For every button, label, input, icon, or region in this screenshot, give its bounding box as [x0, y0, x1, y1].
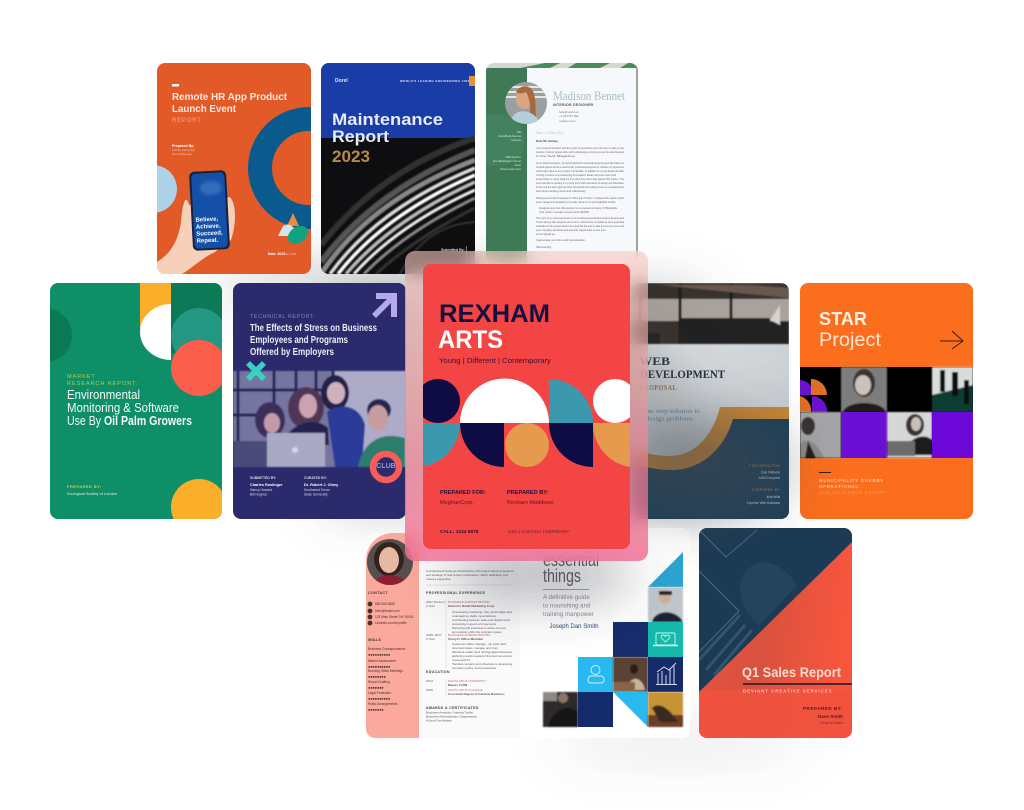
geometric tile	[800, 379, 827, 412]
heading text: Joseph Dan Smith	[550, 624, 599, 630]
letter body: Date: 12 May, 2023	[536, 131, 564, 135]
contact and skills: 555-555-5555	[375, 602, 395, 606]
title: Prepared By:	[172, 144, 194, 148]
footer text: DUE DILIGENCE REPORT	[819, 490, 888, 495]
experience column: company policy and procedures	[452, 666, 496, 670]
title: Date: 2023	[268, 252, 285, 256]
prepared text	[747, 464, 780, 505]
background shadow glow	[210, 269, 810, 750]
title text: Offered by Employers	[250, 347, 334, 358]
contact and skills: ●●●●●●●●●●	[368, 696, 391, 701]
title text: Use By Oil Palm Growers	[67, 414, 192, 428]
prepared text: PREPARED BY	[752, 488, 780, 492]
prepared text: Superior Web Solutions	[747, 501, 780, 505]
phone	[189, 170, 230, 251]
frosted glass panel	[405, 251, 648, 561]
letter body: hospital spaces and as a result of this professional experience I believe my experience	[536, 165, 624, 169]
letter body: Cost Cutter renovation project worth $30000	[539, 210, 589, 214]
letter body: I have along with projects and more I should the considered as a potential	[536, 220, 624, 224]
title text: TECHNICAL REPORT:	[250, 314, 315, 320]
contact and skills: ●●●●●●●	[368, 707, 384, 712]
experience column: PROFESSIONAL EXPERIENCE	[426, 591, 486, 595]
dark diagonal photo	[699, 528, 852, 692]
footer text: MUNICIPALITY DUKRÉS	[819, 478, 884, 483]
proposal heading: DEVELOPMENT	[640, 369, 725, 381]
contact line	[440, 529, 570, 535]
experience column: Master in BM	[448, 683, 468, 687]
title: Event Manager	[172, 152, 192, 156]
sidebar address: Preservation Ave	[500, 167, 521, 171]
name: madison.com	[559, 119, 576, 123]
letter body: position of interior design officer with a challenging company as per the advertisement	[536, 150, 624, 154]
header and title: WORLD'S LEADING ENGINEERING FIRM	[400, 79, 471, 83]
proposal heading: PROPOSAL	[640, 384, 677, 392]
prepared text: Julia Wills	[766, 495, 780, 499]
prepared for block: MeghanCorp.	[440, 500, 474, 506]
submitter text	[250, 476, 339, 496]
proposal heading: your design problems	[631, 416, 694, 422]
letter body: Designed more than office spaces for a renowned company in Philadelphia	[539, 206, 617, 210]
person tile	[578, 657, 613, 692]
hand holding phone	[157, 197, 235, 274]
contact and skills: Market Assessment	[368, 659, 396, 663]
contact and skills: SKILLS	[368, 638, 381, 642]
experience column: Overseeing marketing, risk, and budget and	[452, 610, 512, 614]
cover title: ARTS	[438, 326, 503, 354]
title: Remote HR App Product	[172, 91, 287, 103]
card: Q1 Sales Report	[699, 528, 852, 738]
submitter text: Bill Hughes	[250, 492, 267, 496]
collage of report cards	[50, 63, 973, 766]
experience column: career expertise	[426, 577, 451, 581]
card: Remote HR App	[157, 63, 311, 274]
letter body: company.	[536, 232, 556, 236]
sidebar address: 100	[516, 130, 521, 134]
experience column: SANTA CRUZ UNIVERSITY	[448, 679, 487, 683]
title text: Zoological Society of London	[67, 491, 117, 496]
prepared text: AAW Everyone	[758, 476, 780, 480]
card: resume	[366, 533, 526, 738]
heading text: essential	[543, 550, 599, 570]
letter body: in the New Magazine.	[536, 154, 576, 158]
letter body: to this and are well organized and successful and I always focus on completing the	[536, 185, 624, 189]
photo: woman at laptop	[887, 412, 932, 458]
photo: chess	[932, 367, 973, 412]
experience column: research	[452, 658, 470, 662]
card: STAR Project	[800, 283, 973, 519]
header and title: Maintenance	[332, 110, 443, 129]
report title	[742, 664, 852, 725]
contact line: USA | CANADA | GERMANY	[508, 529, 570, 535]
submitter text: Charles Roslinger	[250, 483, 283, 487]
experience column: Customer office manage, run point and	[452, 642, 506, 646]
contact line: CALL: 1234 5678	[440, 529, 479, 535]
submitter text: State University	[304, 492, 328, 496]
phone slogan: Repeat.	[196, 238, 219, 245]
title: Ashley Campbell	[172, 148, 195, 152]
light blue circle	[157, 165, 177, 213]
experience column: BUSINESS ADMINISTRATOR	[448, 600, 490, 604]
card: Web Development	[630, 283, 789, 519]
experience column: All and Certificates	[426, 718, 452, 722]
title text: Employees and Programs	[250, 335, 348, 346]
name: INTERIOR DESIGNER	[553, 103, 594, 107]
experience column: 2 Year	[426, 604, 435, 608]
architecture strands	[321, 138, 475, 274]
arrow icon	[372, 293, 397, 318]
heading text	[543, 550, 599, 630]
experience column: A professional business Administrator with project-based experience	[426, 569, 514, 573]
name: +1 234 567 890	[559, 114, 579, 118]
cross icon	[246, 361, 266, 381]
title: REPORT	[172, 118, 202, 124]
prepared for block: PREPARED FOR:	[440, 490, 486, 496]
experience column: 2 Year	[426, 637, 435, 641]
report title: Head of Sales	[820, 721, 843, 725]
experience column: 2013	[426, 679, 433, 683]
report title: DEVIANT CREATIVE SERVICES	[743, 688, 832, 694]
green sidebar	[486, 68, 527, 263]
title text: PREPARED BY:	[67, 484, 102, 489]
heading: Project	[819, 329, 882, 351]
sidebar address	[493, 130, 522, 171]
experience column: processing requests and payments	[452, 622, 496, 626]
leaves band	[486, 63, 638, 263]
title: Jan 2023	[284, 252, 297, 256]
letter body: your company and look and see that I appreciate to see your	[536, 228, 606, 232]
sidebar address: Newark	[512, 138, 522, 142]
photo: smiling woman	[841, 367, 887, 412]
name: Madison Bennet	[553, 88, 625, 103]
letter body	[536, 131, 624, 249]
letter body: I bring a focus on producing innovative ideas and are well and	[536, 173, 616, 177]
report title: Dave Smith	[818, 714, 843, 719]
experience column: Sharon's Retail Marketing Corp.	[448, 604, 495, 608]
experience column: managing daily operations	[452, 614, 497, 618]
cover title: REXHAM	[439, 300, 550, 328]
title	[172, 84, 297, 256]
experience column: and analysis within the company system	[452, 630, 502, 634]
experience column: SANTA CRUZ COLLEGE	[448, 688, 483, 692]
footer text: OPERATIONAL	[819, 484, 859, 489]
submitter text: Southwest Texas	[304, 488, 330, 492]
sidebar address: Wilming Ave	[506, 155, 521, 159]
arrow icon	[940, 331, 963, 349]
red ring badge	[373, 454, 399, 480]
red ring badge: CLUB	[376, 463, 396, 470]
header and title	[332, 76, 475, 264]
people	[255, 402, 285, 438]
heading text: things	[543, 566, 581, 586]
title text	[67, 374, 192, 496]
header and title: Submitted By:	[441, 248, 465, 252]
decorative ring	[248, 107, 311, 229]
header and title: 2023	[332, 147, 370, 166]
header and title: Report	[332, 127, 389, 146]
contact and skills: 123 Main Street, NY 10001	[375, 615, 414, 619]
experience column: Worked under and during appointments	[452, 650, 512, 654]
letter body: work will also be working in my work and credit extensions of design and fabrication	[536, 181, 624, 185]
cover title: Young | Different | Contemporary	[439, 356, 551, 365]
sidebar address: Del Washington Street	[493, 159, 521, 163]
contact and skills: ●●●●●●●	[368, 685, 384, 690]
name: hello@mail.com	[559, 110, 580, 114]
title text	[250, 314, 377, 358]
card: essential things	[520, 528, 690, 738]
chart tile	[648, 657, 683, 692]
letter body: As an Interior Designer I am accomplished in functional designing and fabrication for	[536, 161, 624, 165]
letter body: successfully to many distance in a short time that I also gained this interior. The	[536, 177, 624, 181]
mosaic	[543, 552, 683, 727]
prepared for block: PREPARED BY:	[507, 490, 549, 496]
contact and skills: ●●●●●●●●	[368, 674, 387, 679]
heading text: to nourishing and	[543, 602, 591, 610]
phone slogan: Succeed,	[196, 230, 223, 238]
contact and skills: ●●●●●●●●●●	[368, 664, 391, 669]
experience column: Partnering with executives to advise success	[452, 626, 506, 630]
title text: RESEARCH REPORT:	[67, 381, 138, 387]
title: Launch Event	[172, 103, 236, 115]
experience column: Business Administration Organization	[426, 714, 478, 718]
central panel drop shadow	[445, 320, 785, 599]
experience column: Coordinating between sales and departments	[452, 618, 510, 622]
geometric shapes	[50, 283, 222, 519]
phone slogan: Believe,	[195, 217, 219, 224]
submitter text: CURATED BY:	[304, 476, 327, 480]
title text: The Effects of Stress on Business	[250, 323, 377, 334]
contact and skills: Business Correspondence	[368, 647, 406, 651]
card: Madison Bennet letter	[465, 63, 638, 263]
experience column: AWARDS & CERTIFICATES	[426, 706, 479, 710]
experience column: 2017-Present	[426, 600, 445, 604]
letter body: The more of my work experience is of a business and attracts purpose keeping and	[536, 216, 624, 220]
card: Effects of Stress	[233, 283, 406, 519]
experience column: gathering results needed of the best intervention	[452, 654, 512, 658]
cover title	[438, 300, 551, 365]
contact and skills: Running Office Meetings	[368, 669, 403, 673]
experience column: BUSINESS ADMINISTRATOR	[448, 633, 490, 637]
heading	[820, 312, 881, 350]
contact and skills	[368, 591, 414, 712]
heading: STAR	[819, 309, 867, 329]
experience column: Associate Degree in General Business	[448, 692, 505, 696]
experience column: Handled company and schedules to developing	[452, 662, 512, 666]
prepared for block	[440, 490, 554, 506]
letter body: Dear Mr. Huxley,	[536, 139, 558, 143]
photo grid	[800, 367, 973, 458]
dark block with arc	[630, 407, 789, 519]
geometric band	[416, 378, 637, 467]
heading text: A definitive guide	[543, 594, 590, 601]
experience column: EDUCATION	[426, 670, 450, 674]
report title: Q1 Sales Report	[742, 664, 841, 680]
name	[553, 92, 625, 122]
photo: woman at desk	[613, 657, 648, 692]
title text: Monitoring & Software	[67, 401, 179, 415]
experience column: Business Analytics Training Toolkit	[426, 710, 473, 714]
photo: man	[800, 412, 841, 458]
letter body: were manage and handled by me today. Some of my work highlights include:	[536, 200, 616, 204]
prepared text: PREPARED FOR	[749, 464, 780, 468]
card: Environmental Monitoring	[50, 283, 222, 519]
sidebar address: Grandfield Avenue	[498, 134, 521, 138]
experience column: document status, manage, and more	[452, 646, 498, 650]
title text: Environmental	[67, 388, 140, 402]
phone slogan: Achieve,	[196, 223, 221, 231]
contact and skills: Legal Protection	[368, 691, 391, 695]
card: Maintenance Report	[321, 63, 475, 274]
submitter text: Nancy Howard	[250, 488, 272, 492]
letter body: I am a Interior Designer with five years of experience and I am keen to take on the	[536, 146, 624, 150]
experience column: and strategic IT and project coordination, offers dedication and	[426, 573, 508, 577]
submitter text: Dr. Robert J. Olney	[304, 483, 339, 487]
letter body: best and exciting work and effectively.	[536, 189, 586, 193]
title text: MARKET	[67, 374, 96, 380]
header and title: Dorel	[335, 78, 348, 84]
experience column: 2010	[426, 688, 433, 692]
portrait	[367, 539, 413, 585]
team photo	[233, 371, 406, 467]
letter body: I appreciate your time and consideration.	[536, 238, 586, 242]
phone slogan	[195, 216, 223, 245]
experience column: Cheryl's Office Maintain	[448, 637, 483, 641]
portrait	[505, 82, 547, 124]
contact and skills: Report Drafting	[368, 680, 390, 684]
contact and skills: hello@email.com	[375, 609, 400, 613]
photo line art	[699, 530, 797, 675]
proposal heading	[640, 358, 725, 422]
footer text	[819, 472, 888, 495]
report title: PREPARED BY:	[803, 706, 843, 711]
contact and skills: Public Arrangements	[368, 702, 398, 706]
proposal heading: WEB	[639, 356, 670, 368]
letter body: would add value to any project I undertake. In addition to my professional skills	[536, 169, 624, 173]
experience column	[426, 569, 514, 722]
salmon sidebar	[366, 533, 419, 738]
proposal heading: Our one stop solution to	[631, 409, 700, 415]
sidebar address: Suite	[515, 163, 521, 167]
photo: yellow sweater	[648, 692, 683, 727]
contact and skills: Linkedin.com/in/profile	[375, 621, 407, 625]
photo: two colleagues	[543, 692, 578, 727]
prepared for block: Rexham Maddison	[507, 500, 554, 506]
experience column: 2015- 2017	[426, 633, 442, 637]
laptop heart tile	[648, 622, 683, 657]
contact and skills: ●●●●●●●●●●	[368, 652, 391, 657]
3D cone shapes	[278, 213, 308, 244]
prepared text: Dale Williams	[761, 470, 780, 474]
submitter text: SUBMITTED BY:	[250, 476, 276, 480]
heading text: training manpower	[543, 611, 594, 618]
contact and skills: CONTACT	[368, 591, 389, 595]
letter body: Sincerely,	[536, 245, 552, 249]
letter body: candidate for the project about some and that the area I make it to feel you soon and	[536, 224, 624, 228]
photo: man in suit	[648, 587, 683, 622]
letter body: Working as an Interior Designer for More than 5 Years I completed 20 projects, which	[536, 196, 624, 200]
office photo	[630, 283, 789, 344]
